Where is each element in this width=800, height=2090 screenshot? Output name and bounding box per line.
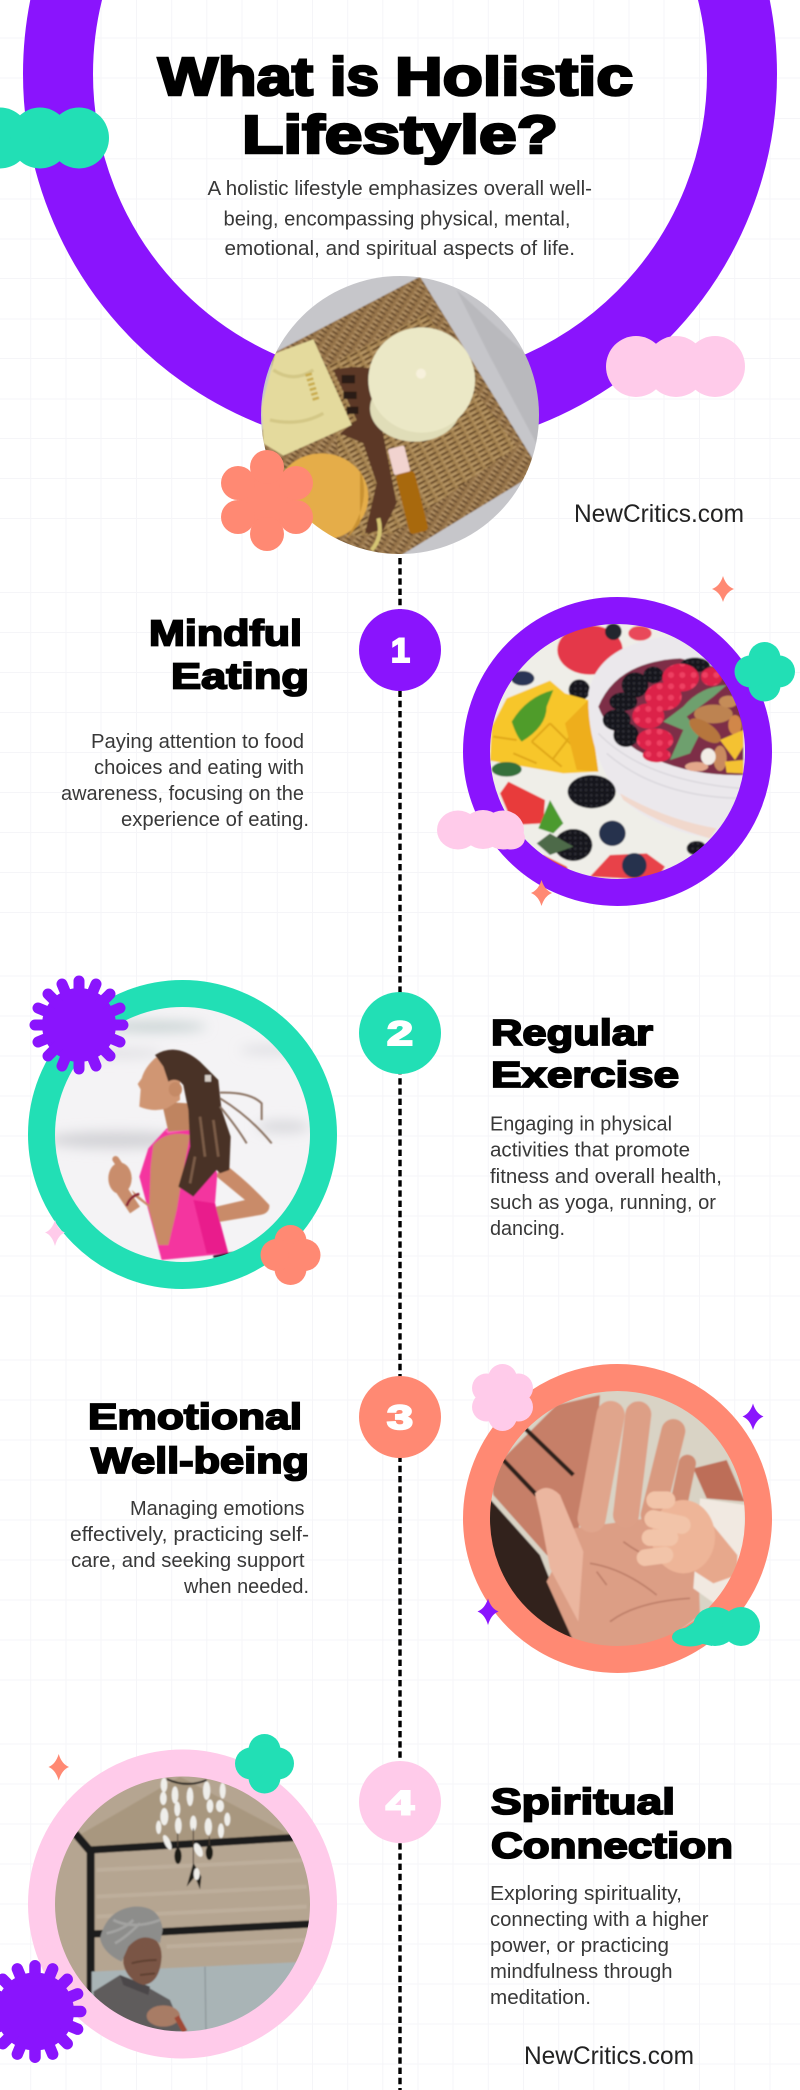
- dashed timeline: [398, 558, 402, 2090]
- sparkle: salmon ring 4: [48, 1754, 69, 1780]
- sparkle: salmon ring 1: [531, 880, 552, 906]
- section 3 text: care, and seeking support: [71, 1550, 305, 1572]
- section 4 text: [490, 1883, 709, 2009]
- section 4 text: mindfulness through: [490, 1961, 672, 1983]
- section 2 number badge: [359, 992, 441, 1074]
- section 3 heading: Well-being: [91, 1440, 309, 1481]
- title: [158, 47, 633, 165]
- sparkle: salmon top right: [712, 576, 734, 602]
- section 3 heading: Emotional: [88, 1396, 302, 1437]
- flower: pink: [472, 1364, 533, 1431]
- section 1 number badge: [359, 609, 441, 691]
- brand label top: NewCritics.com: [574, 500, 744, 528]
- section 1 text: choices and eating with: [94, 757, 304, 779]
- section 1 text: Paying attention to food: [91, 731, 304, 753]
- section 2 heading: Regular: [491, 1012, 653, 1053]
- section 1 heading: Mindful: [149, 612, 302, 654]
- sparkle: purple lower: [478, 1598, 498, 1625]
- photo: wicker basket with candle and cosmetics: [261, 276, 539, 554]
- flower: salmon: [221, 450, 313, 551]
- title: Holistic: [395, 47, 633, 107]
- section 2 text: Engaging in physical: [490, 1114, 672, 1136]
- section 2 text: activities that promote: [490, 1140, 690, 1162]
- section 3 text: effectively, practicing self-: [70, 1524, 309, 1546]
- section 1 heading: Eating: [171, 656, 309, 696]
- section 4 text: meditation.: [490, 1987, 591, 2009]
- section 3 text: Managing emotions: [130, 1498, 304, 1520]
- title: Lifestyle?: [242, 105, 558, 165]
- photo: fruit and berry bowl: [490, 624, 745, 879]
- section 4 heading: Connection: [491, 1825, 733, 1866]
- section 1 ring: [476, 610, 758, 892]
- section 3 text: [70, 1498, 309, 1598]
- section 4 heading: Spiritual: [491, 1781, 675, 1822]
- section 3 number badge: 3: [387, 1399, 413, 1437]
- section 2 text: such as yoga, running, or: [490, 1192, 716, 1214]
- section 3 heading: [88, 1396, 309, 1481]
- section 4 number badge: 4: [386, 1784, 414, 1822]
- section 4 text: Exploring spirituality,: [490, 1883, 682, 1905]
- brand label bottom: NewCritics.com: [524, 2042, 694, 2070]
- section 4 heading: [491, 1781, 733, 1866]
- section 2 ring: [42, 994, 324, 1276]
- intro text: A holistic lifestyle emphasizes overall well-: [208, 178, 592, 200]
- section 1 text: [61, 731, 309, 831]
- photo: woman running: [55, 1007, 310, 1262]
- intro text: emotional, and spiritual aspects of life.: [224, 238, 575, 260]
- section 2 heading: [491, 1012, 679, 1095]
- section 3 text: when needed.: [183, 1576, 309, 1598]
- section 2 heading: Exercise: [491, 1054, 679, 1095]
- title: is: [330, 47, 379, 107]
- sparkle: pink: [45, 1220, 65, 1246]
- blob: green cloud top left: [0, 108, 109, 168]
- section 3 number badge: [359, 1376, 441, 1458]
- section 4 text: power, or practicing: [490, 1935, 669, 1957]
- title: What: [158, 47, 313, 107]
- burst: purple ring 4: [0, 1966, 81, 2057]
- section 1 text: awareness, focusing on the: [61, 783, 304, 805]
- section 3 ring: [476, 1378, 758, 1660]
- section 4 number badge: [359, 1761, 441, 1843]
- section 1 number badge: 1: [391, 632, 410, 670]
- blob: pink cloud on ring: [437, 810, 525, 850]
- section 2 text: fitness and overall health,: [490, 1166, 722, 1188]
- section 2 text: dancing.: [490, 1218, 565, 1240]
- blob: green cloud on ring: [672, 1607, 760, 1646]
- section 2 number badge: 2: [387, 1015, 413, 1053]
- intro text: [208, 178, 592, 260]
- burst: purple ring 2: [35, 981, 123, 1069]
- intro purple ring: [58, 0, 742, 416]
- section 1 text: experience of eating.: [121, 809, 309, 831]
- photo: woman in turban under dreamcatcher: [55, 1776, 310, 2032]
- sparkle: purple upper: [742, 1404, 764, 1430]
- clover: salmon: [260, 1225, 320, 1285]
- clover: green ring 4: [235, 1734, 294, 1794]
- section 2 text: [490, 1114, 722, 1240]
- section 1 heading: [149, 612, 309, 696]
- section 4 ring: [42, 1763, 324, 2045]
- photo: adult hand holding baby hand: [490, 1391, 745, 1646]
- clover: green: [734, 642, 795, 702]
- intro text: being, encompassing physical, mental,: [224, 208, 570, 230]
- section 4 text: connecting with a higher: [490, 1909, 709, 1931]
- blob: pink cloud: [606, 336, 745, 397]
